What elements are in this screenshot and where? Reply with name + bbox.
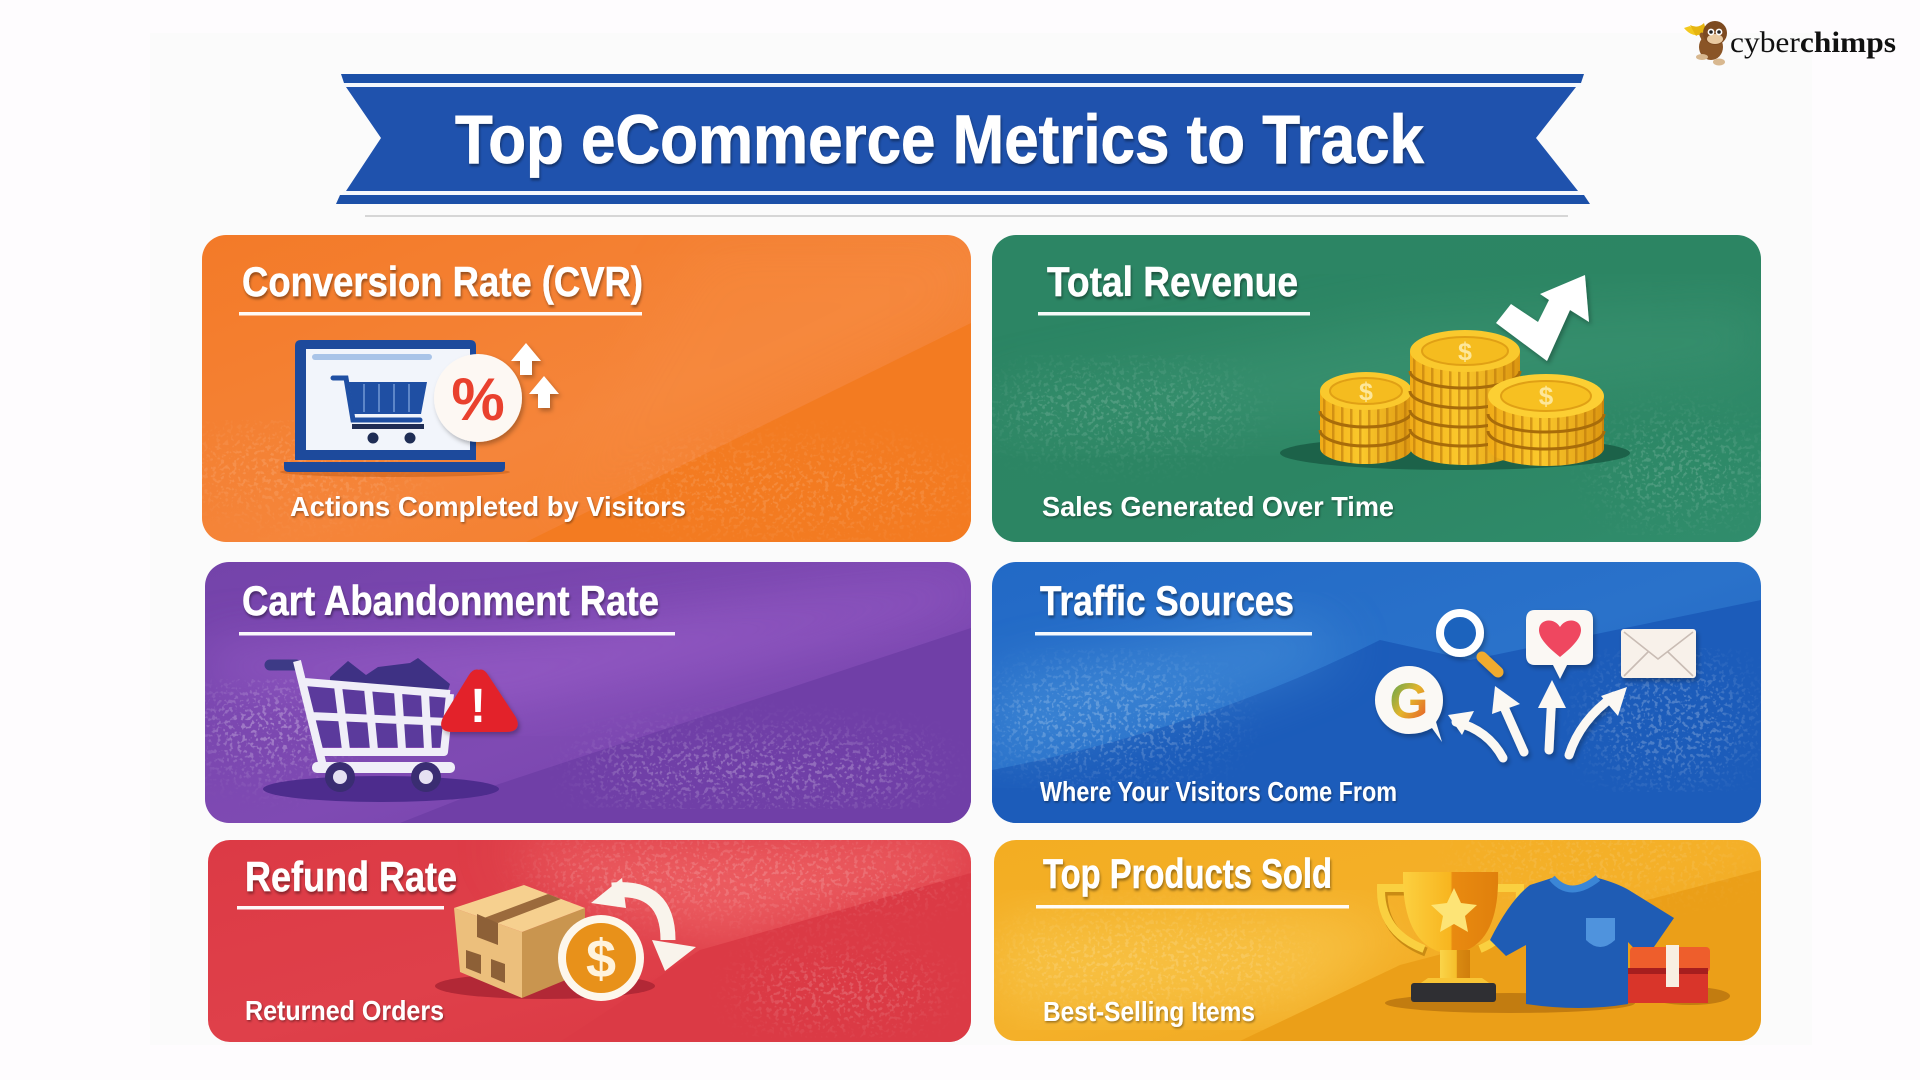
heading: Top Products Sold <box>1043 850 1332 897</box>
banner ribbon shape <box>336 74 1590 204</box>
icon: google bubble: G <box>1390 673 1428 729</box>
shopping cart <box>333 378 427 444</box>
heading underline <box>1035 632 1312 636</box>
icon: trophy <box>1381 872 1520 1002</box>
logo: cyberchimps <box>1684 21 1896 66</box>
card background <box>990 562 1761 823</box>
heading underline <box>237 906 444 910</box>
icon group: traffic channels <box>1375 610 1696 758</box>
caption: Sales Generated Over Time <box>1042 491 1394 522</box>
panel: total revenue <box>990 235 1761 542</box>
panel: cart abandonment rate <box>200 562 971 823</box>
panel: refund rate <box>208 840 971 1042</box>
alert triangle: ! <box>470 680 486 733</box>
percent badge <box>434 354 522 442</box>
refund coin: $ <box>586 929 616 989</box>
percent badge: % <box>451 366 505 433</box>
icon: box with refund coin <box>435 878 696 1001</box>
icon group: trophy, shirt and gift <box>1381 872 1730 1013</box>
caption: Where Your Visitors Come From <box>1040 776 1397 807</box>
left coin stack: $ <box>1359 378 1373 406</box>
right coin stack <box>1488 374 1604 466</box>
icon: abandoned cart with alert <box>263 658 516 802</box>
refund arrowheads <box>591 878 696 971</box>
caption: Actions Completed by Visitors <box>290 491 686 522</box>
icon: google bubble <box>1375 666 1443 742</box>
arrows: traffic flow <box>1456 692 1614 758</box>
banner shadow line <box>365 215 1568 217</box>
ground shadow <box>435 973 655 999</box>
right coin stack: $ <box>1539 381 1554 411</box>
title banner <box>336 74 1590 204</box>
ground shadow <box>1385 993 1635 1013</box>
card background <box>200 562 971 823</box>
heading: Traffic Sources <box>1040 577 1294 624</box>
icon: coin stacks with arrow <box>1280 275 1630 470</box>
cart contents <box>330 658 450 700</box>
up arrows <box>511 343 559 408</box>
heading underline <box>1038 312 1310 316</box>
icon: envelope <box>1621 629 1696 678</box>
title text: Top eCommerce Metrics to Track <box>455 101 1425 178</box>
growth arrow <box>1496 275 1589 361</box>
alert triangle <box>443 672 516 733</box>
card background <box>180 235 971 542</box>
card background <box>990 235 1761 542</box>
icon: shirt <box>1490 878 1674 1008</box>
heading underline <box>239 312 642 316</box>
refund arrows <box>612 890 668 940</box>
logo wordmark: cyberchimps <box>1730 26 1896 59</box>
card background <box>994 840 1761 1041</box>
panel: traffic sources <box>990 562 1761 823</box>
center coin stack: $ <box>1458 338 1472 366</box>
shopping cart <box>270 661 455 792</box>
heading underline <box>1036 905 1349 908</box>
laptop <box>280 340 510 477</box>
icon: laptop with cart and percent <box>280 340 559 477</box>
heading: Refund Rate <box>245 853 457 900</box>
ground shadow <box>263 776 499 802</box>
panel: conversion rate <box>180 235 971 542</box>
left coin stack <box>1320 372 1412 464</box>
icon: magnifier <box>1440 613 1498 672</box>
heading underline <box>239 632 675 636</box>
icon: monkey with banana <box>1684 21 1727 66</box>
heading: Total Revenue <box>1047 258 1298 305</box>
ground shadow <box>1280 436 1630 470</box>
arrowheads <box>1448 680 1627 735</box>
panel: top products sold <box>994 840 1761 1041</box>
heading: Conversion Rate (CVR) <box>242 258 643 305</box>
cardboard box <box>454 885 585 998</box>
caption: Returned Orders <box>245 995 444 1026</box>
card background <box>208 840 971 1042</box>
heading: Cart Abandonment Rate <box>242 577 659 624</box>
icon: heart bubble <box>1526 610 1593 679</box>
icon: red gift box <box>1628 945 1710 1003</box>
refund coin <box>558 915 644 1001</box>
caption: Best-Selling Items <box>1043 996 1255 1027</box>
center coin stack <box>1410 330 1520 465</box>
